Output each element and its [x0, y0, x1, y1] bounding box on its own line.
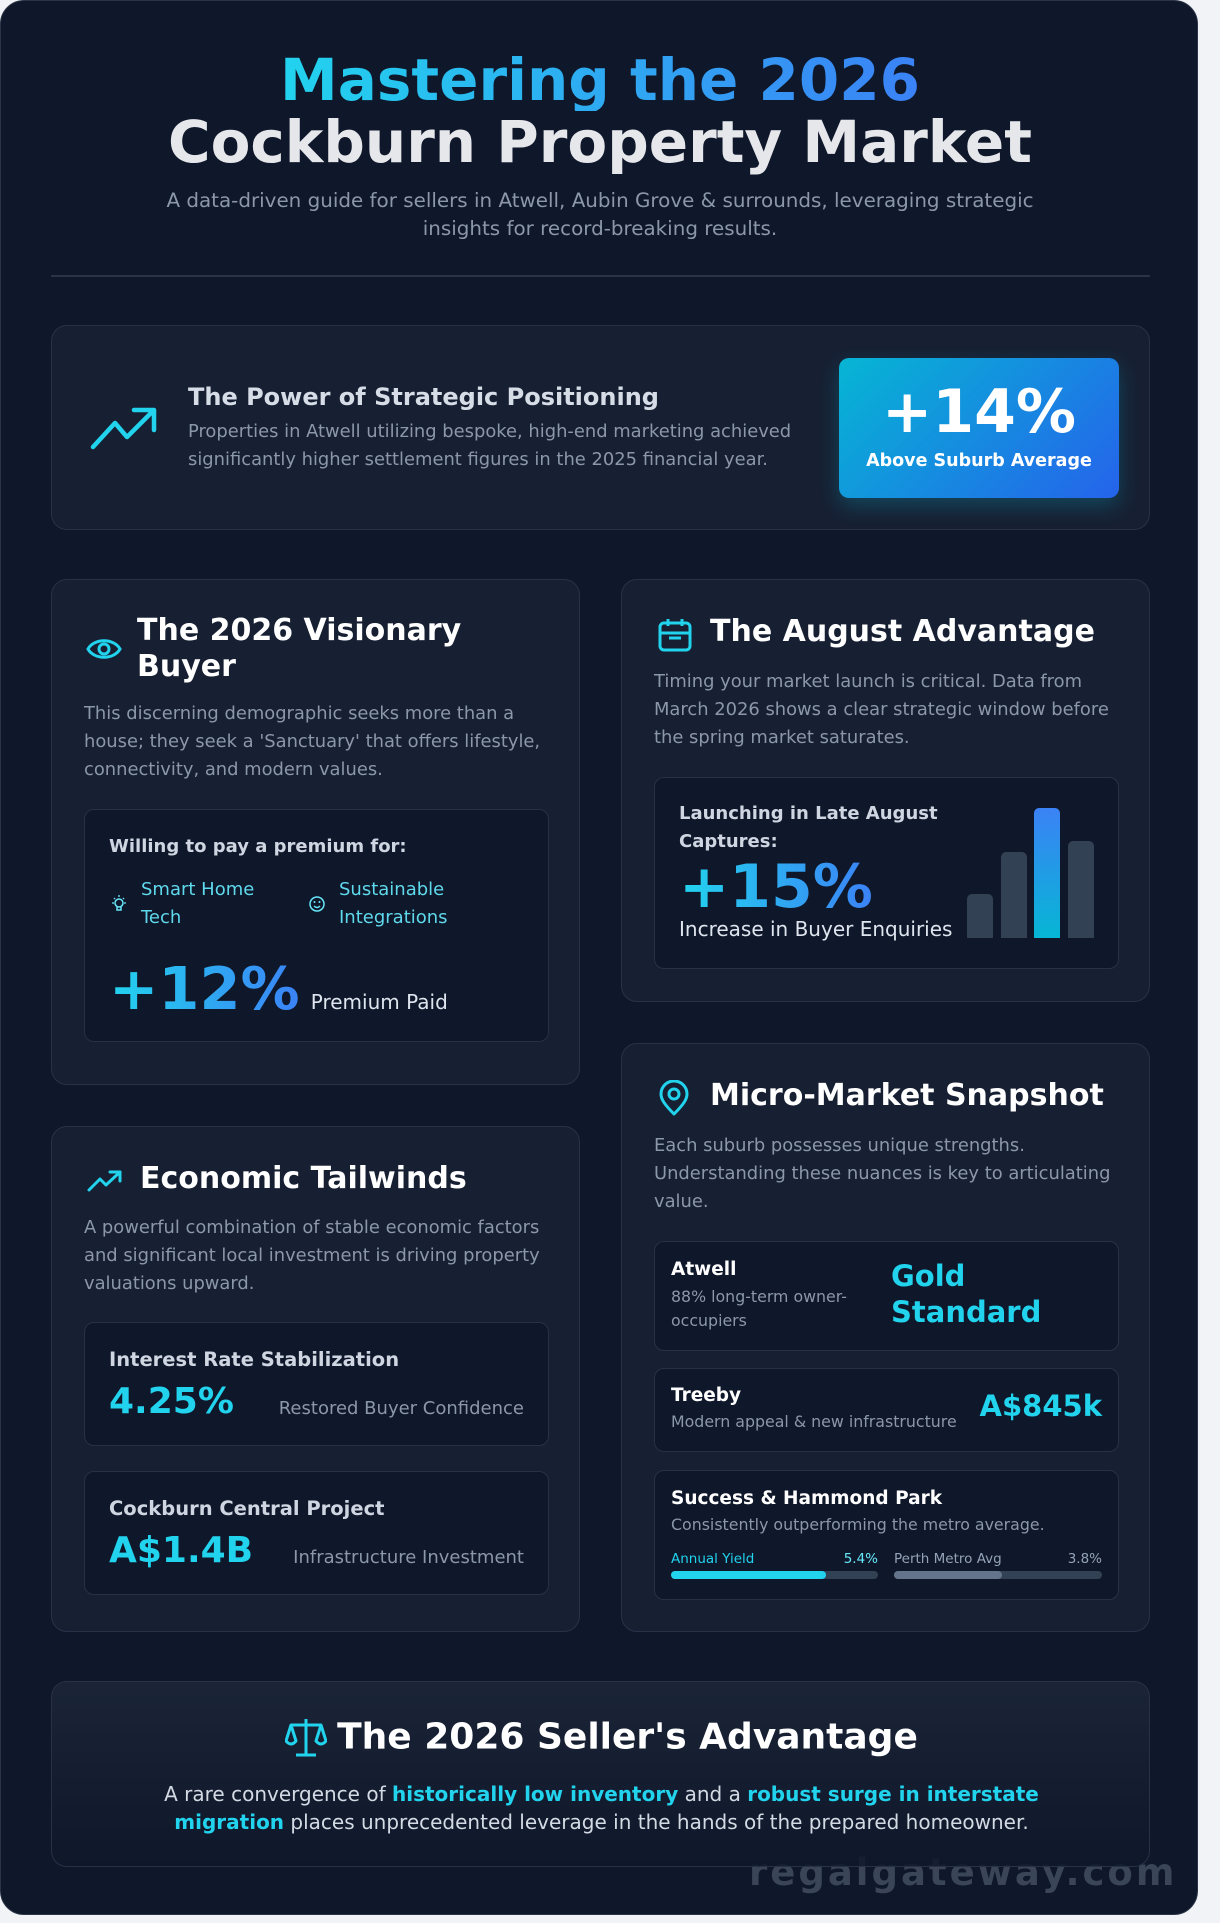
icon: calendar: [658, 619, 692, 652]
row: Success & Hammond Park: [654, 1470, 1119, 1600]
bar: annual yield: 5.4%: [844, 1551, 878, 1567]
premium box: Sustainable: [339, 879, 444, 900]
badge: +14%: +14%: [882, 377, 1076, 447]
row: Atwell: occupiers: [671, 1311, 747, 1330]
row: Atwell: [654, 1241, 1119, 1351]
panel: august advantage: [621, 579, 1150, 1002]
row: Treeby: Treeby: [671, 1385, 741, 1406]
bar: perth metro: 3.8%: [1068, 1551, 1102, 1567]
text: [654, 671, 1109, 748]
row: Success & Hammond Park: Consistently outperforming the metro average.: [671, 1515, 1045, 1534]
stat: +12%: Premium Paid: [311, 990, 448, 1014]
badge: +14%: Above Suburb Average: [866, 451, 1092, 471]
heading: Economic Tailwinds: [140, 1161, 467, 1196]
row: Treeby: Modern appeal & new infrastructure: [671, 1412, 957, 1431]
heading: [137, 613, 461, 684]
panel: economic tailwinds: [51, 1126, 580, 1632]
row: Atwell: Gold: [891, 1259, 965, 1293]
stat box: Launching in Late August: [679, 803, 938, 824]
icon: eye: [86, 639, 122, 659]
text: [164, 1782, 1039, 1834]
row: Atwell: Atwell: [671, 1259, 736, 1280]
icon: trend: [87, 1170, 122, 1192]
bar: annual yield: Annual Yield: [671, 1551, 754, 1567]
text: [188, 421, 791, 470]
text: and significant local investment is driving property: [84, 1245, 540, 1266]
stat: interest rate: Interest Rate Stabilization: [109, 1348, 399, 1371]
text: migration places unprecedented leverage in the hands of the prepared homeowner.: [174, 1810, 1029, 1834]
subtitle: insights for record-breaking results.: [423, 217, 777, 240]
title: Mastering the 2026: [280, 46, 920, 114]
text: [654, 1135, 1110, 1212]
row: Atwell: 88% long-term owner-: [671, 1287, 847, 1306]
text: [84, 703, 540, 780]
title: Cockburn Property Market: [168, 108, 1032, 176]
bar: perth metro: Perth Metro Avg: [894, 1551, 1002, 1567]
stat box: Increase in Buyer Enquiries: [679, 917, 952, 941]
text: Properties in Atwell utilizing bespoke, high-end marketing achieved: [188, 421, 791, 442]
heading: Buyer: [137, 649, 236, 684]
premium box: [84, 809, 549, 1042]
text: A rare convergence of historically low inventory and a robust surge in interstate: [164, 1782, 1039, 1806]
title: [168, 46, 1032, 176]
subtitle: A data-driven guide for sellers in Atwell, Aubin Grove & surrounds, leveraging strategic: [166, 189, 1034, 212]
row: Success & Hammond Park: Success & Hammond Park: [671, 1488, 942, 1509]
panel: micro-market: [621, 1043, 1150, 1632]
text: significantly higher settlement figures in the 2025 financial year.: [188, 449, 768, 470]
text: This discerning demographic seeks more than a: [84, 703, 514, 724]
text: connectivity, and modern values.: [84, 759, 383, 780]
heading: The 2026 Visionary: [137, 613, 461, 648]
icon: trend up: [90, 408, 156, 450]
bar: perth metro: [894, 1551, 1102, 1579]
subtitle: [166, 189, 1034, 240]
stat: cockburn central: A$1.4B: [109, 1530, 253, 1571]
premium box: Willing to pay a premium for:: [109, 836, 407, 857]
premium box: Tech: [141, 907, 181, 928]
text: the spring market saturates.: [654, 727, 910, 748]
text: value.: [654, 1191, 709, 1212]
stat: cockburn central: [84, 1471, 549, 1595]
icon: bulb: [112, 895, 126, 911]
stat: interest rate: [84, 1322, 549, 1446]
text: Each suburb possesses unique strengths.: [654, 1135, 1025, 1156]
text: Understanding these nuances is key to articulating: [654, 1163, 1110, 1184]
row: Atwell: Standard: [891, 1295, 1041, 1329]
stat: +15%: +15%: [679, 852, 873, 922]
text: valuations upward.: [84, 1273, 254, 1294]
stat: +12%: +12%: [109, 954, 300, 1023]
row: Treeby: [654, 1368, 1119, 1452]
stat: cockburn central: Infrastructure Investment: [293, 1547, 524, 1568]
bar chart: [967, 808, 1094, 938]
panel: visionary buyer: [51, 579, 580, 1085]
heading: The Power of Strategic Positioning: [188, 383, 659, 411]
row: Treeby: A$845k: [980, 1389, 1102, 1423]
text: A powerful combination of stable economic factors: [84, 1217, 539, 1238]
heading: The August Advantage: [710, 614, 1095, 649]
icon: scales: [285, 1719, 327, 1756]
panel: seller's advantage: [51, 1681, 1150, 1867]
stat box: [654, 777, 1119, 969]
icon: map pin: [660, 1080, 688, 1116]
text: Timing your market launch is critical. Data from: [654, 671, 1082, 692]
text: house; they seek a 'Sanctuary' that offers lifestyle,: [84, 731, 540, 752]
text: March 2026 shows a clear strategic window before: [654, 699, 1109, 720]
premium box: Smart Home: [141, 879, 254, 900]
stat box: Captures:: [679, 831, 778, 852]
heading: Micro-Market Snapshot: [710, 1078, 1104, 1113]
stat: +12%: [109, 954, 448, 1023]
bar: annual yield: [671, 1551, 878, 1579]
icon: smile: [309, 896, 325, 912]
premium box: Integrations: [339, 907, 448, 928]
stat: cockburn central: Cockburn Central Project: [109, 1497, 384, 1520]
watermark: regalgateway.com: [749, 1851, 1177, 1894]
panel: strategic positioning: [51, 325, 1150, 530]
badge: +14%: [839, 358, 1119, 498]
text: [84, 1217, 540, 1294]
heading with icon: The 2026 Seller's Advantage: [337, 1716, 918, 1758]
stat: interest rate: Restored Buyer Confidence: [279, 1398, 524, 1419]
stat: interest rate: 4.25%: [109, 1381, 234, 1422]
